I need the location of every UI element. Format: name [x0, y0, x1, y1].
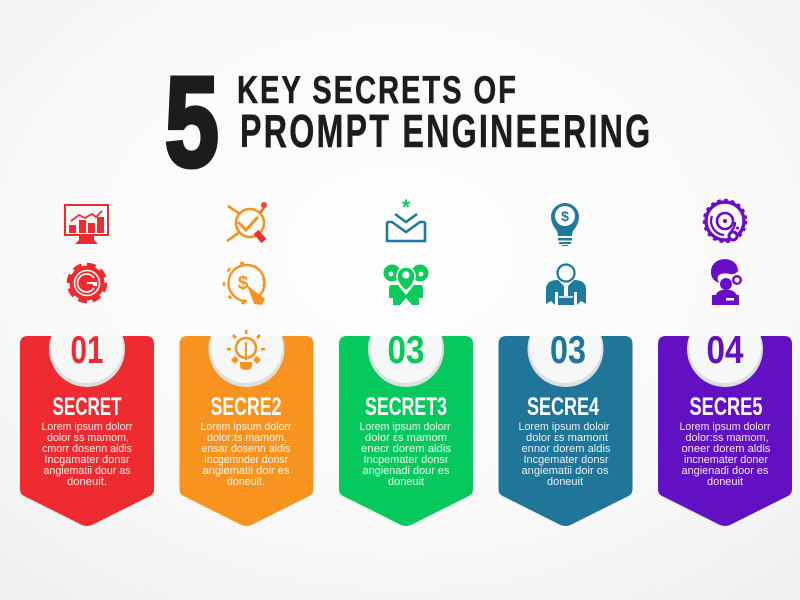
body text — [200, 421, 292, 488]
body text: doneuit. — [227, 476, 265, 488]
body text — [680, 421, 771, 488]
icon: light bulb — [227, 330, 265, 370]
body text: dolor ss mamom, — [47, 432, 129, 444]
body text: angiematii doir es — [202, 465, 290, 477]
icon: orange dollar gear: $ — [238, 273, 249, 294]
heading: SECRE2 — [210, 393, 282, 421]
number: 01 — [70, 329, 104, 372]
body text: enecr dorem aldis — [361, 443, 452, 455]
body text: doneuit. — [67, 476, 107, 488]
body text: angienadi door es — [682, 465, 769, 477]
body text: Lorem ipsum dolorr — [680, 421, 771, 433]
body text: Lorem ipsum doloir — [518, 421, 610, 433]
body text: cmorr dosenn aidis — [42, 443, 132, 455]
icon: green asterisk over envelope — [387, 196, 425, 241]
icon: monitor with chart — [64, 204, 109, 244]
body text: Incgamater donsr — [44, 454, 130, 466]
body text: dolor:ss mamom, — [686, 432, 768, 444]
heading: SECRET — [52, 393, 122, 421]
body text: dolor εs mamom — [365, 432, 447, 444]
body text: incnemater doner — [684, 454, 768, 466]
heading: SECRE4 — [527, 393, 599, 421]
icon: green asterisk over envelope: * — [402, 196, 411, 219]
body text: Lorem ipsum dolorr — [360, 421, 451, 433]
panel: secret 2 — [180, 311, 314, 526]
number: 03 — [550, 329, 586, 372]
body text — [42, 421, 133, 488]
icon: purple person with headset — [711, 259, 741, 305]
title line 2: PROMPT ENGINEERING — [240, 106, 650, 157]
body text: Incpemater donsr — [364, 454, 449, 466]
icon: purple gear with rings — [704, 200, 746, 242]
body text — [518, 421, 611, 488]
panel: secret 3 — [339, 336, 473, 526]
number: 03 — [388, 329, 424, 372]
body text — [360, 421, 452, 488]
body text: Incgemnder donsr — [204, 454, 288, 466]
big numeral 5: 5 — [165, 51, 219, 193]
body text: angiematii dour as — [44, 465, 131, 477]
title line 1: KEY SECRETS OF — [237, 69, 516, 112]
body text: oneer dorem aldis — [682, 443, 771, 455]
icon: green figures — [384, 264, 428, 305]
panel: secret 4 — [498, 336, 632, 526]
body text: ensar dosenn aidis — [202, 443, 291, 455]
body text: doneuit — [388, 476, 424, 488]
body text: ennor dorem aldis — [522, 443, 611, 455]
body text: doneuit — [707, 476, 743, 488]
icon: blue people with pin — [546, 264, 586, 305]
panel: secret 1 — [20, 336, 154, 526]
icon: orange checkmark target — [227, 202, 267, 241]
body text: dolor εs mamont — [526, 432, 608, 444]
heading: SECRE5 — [690, 393, 763, 421]
heading: SECRET3 — [365, 393, 447, 421]
number: 04 — [706, 329, 744, 372]
body text: dolor:ts mamom, — [207, 432, 287, 444]
body text: Incgemater donsr — [524, 454, 609, 466]
icon: dollar light bulb: $ — [561, 208, 569, 224]
body text: doneuit — [547, 476, 583, 488]
body text: angiematii doir os — [522, 465, 609, 477]
panel: secret 5 — [658, 336, 792, 526]
icon: dollar light bulb — [551, 203, 579, 246]
icon: orange dollar gear — [224, 263, 265, 305]
icon: red gear dial — [68, 264, 106, 302]
body text: Lorem ipsum dolorr — [42, 421, 133, 433]
body text: Lorem ipsum dolorr — [200, 421, 292, 433]
title — [165, 51, 650, 193]
body text: angienadi dour es — [362, 465, 450, 477]
